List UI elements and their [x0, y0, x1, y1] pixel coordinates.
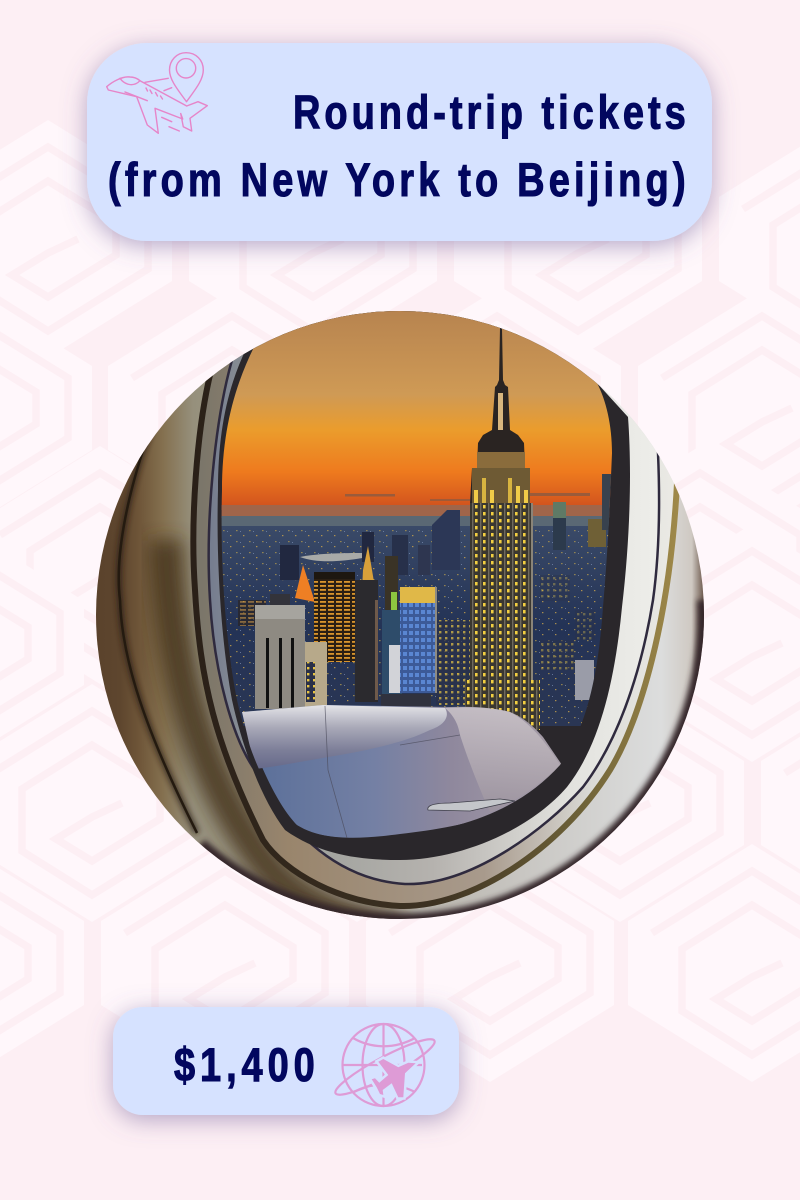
grey building foreground: [255, 594, 327, 709]
blue building: [400, 603, 435, 693]
window view: [210, 300, 630, 838]
price: $1,400: [174, 1039, 315, 1092]
icon: plane with location pin: [107, 53, 207, 133]
title panel: [87, 43, 712, 241]
sky: [222, 311, 612, 510]
heading: Round-trip tickets: [293, 87, 686, 140]
photo: city view from airplane window: [90, 300, 710, 930]
spire building: [362, 546, 374, 580]
window frame: [90, 300, 710, 930]
left low lights: [238, 600, 266, 626]
Empire State Building: [465, 328, 540, 730]
heading: [108, 87, 686, 207]
icon: globe with plane: [331, 1024, 439, 1106]
price panel: [113, 1007, 459, 1115]
green-lit building: [385, 556, 398, 611]
skyline: [210, 328, 630, 730]
heading: (from New York to Beijing): [108, 154, 686, 207]
midtown middle: [436, 620, 470, 705]
orange pyramid: [295, 565, 315, 602]
airplane wing: [242, 705, 562, 838]
dark gold building: [314, 572, 355, 662]
